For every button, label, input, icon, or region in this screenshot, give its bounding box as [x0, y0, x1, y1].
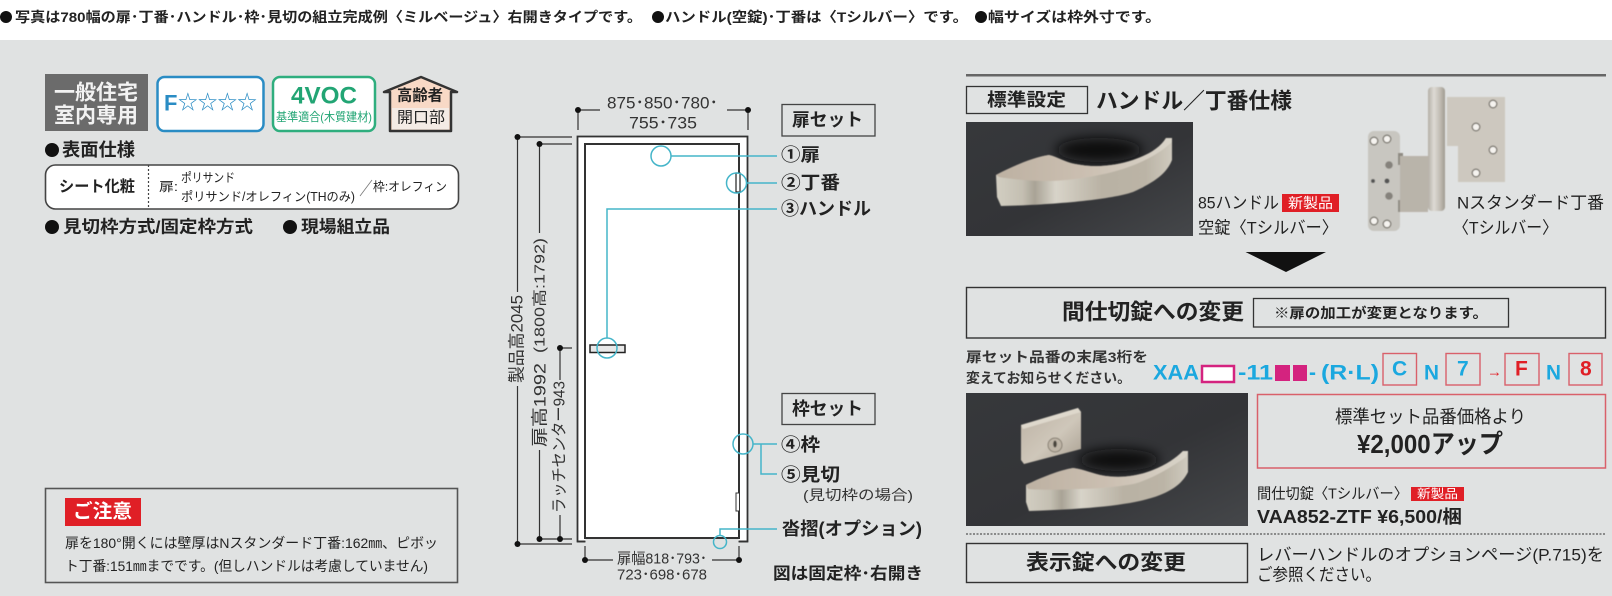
- heading panel: privacy lock change: [966, 288, 1606, 338]
- caption: N standard hinge: [1453, 194, 1604, 238]
- heading panel: privacy lock change: ※扉の加工が変更となります。: [1274, 305, 1488, 321]
- price panel: ¥2,000アップ: [1357, 429, 1503, 459]
- product code: -11: [1238, 362, 1273, 384]
- badge: elderly doorway house: [384, 77, 457, 131]
- part labels: door set: ③ハンドル: [781, 199, 871, 219]
- door set label: 扉セット: [792, 110, 863, 130]
- product code: C: [1392, 358, 1407, 380]
- photo: 85 handle: [966, 122, 1193, 236]
- product code: F: [1515, 358, 1528, 380]
- part labels: frame set: (見切枠の場合): [803, 487, 913, 503]
- photo: N standard hinge: [1368, 87, 1505, 231]
- product code: N: [1424, 362, 1439, 384]
- door width dimension bottom: 扉幅818･793･: [617, 550, 707, 568]
- product code: XAA: [1153, 362, 1199, 384]
- part labels: door set: [781, 145, 871, 219]
- surface spec table: ポリサンド/オレフィン(THのみ): [181, 190, 355, 204]
- standard setting heading: 標準設定: [987, 89, 1066, 110]
- option page reference: ご参照ください。: [1257, 566, 1381, 584]
- option page reference: [1257, 546, 1604, 584]
- badge: general housing interior: 室内専用: [54, 104, 138, 128]
- heading: surface spec: 表面仕様: [62, 140, 135, 160]
- product code: [1153, 354, 1602, 385]
- product code: 8: [1580, 358, 1592, 380]
- badge: F four stars: F: [164, 90, 177, 116]
- height dimensions left: (1800高:1792): [532, 238, 548, 353]
- badge: 4VOC: [273, 77, 375, 131]
- instruction text: 変えてお知らせください。: [966, 370, 1131, 386]
- height dimensions left: 製品高2045: [508, 295, 526, 383]
- notice panel: ご注意: [73, 500, 132, 522]
- feature: frame method: 見切枠方式/固定枠方式: [63, 216, 253, 236]
- door set label: [782, 104, 875, 136]
- door width dimension bottom: [582, 546, 742, 584]
- notice panel: 扉を180°開くには壁厚はNスタンダード丁番:162㎜、ピボッ: [65, 535, 438, 551]
- top notes: 写真は780幅の扉･丁番･ハンドル･枠･見切の組立完成例〈ミルベージュ〉右開きタイプです。: [15, 9, 642, 25]
- badge: general housing interior: 一般住宅: [54, 82, 138, 104]
- door elevation drawing: [577, 136, 748, 543]
- product code: -: [1309, 362, 1316, 384]
- notice panel: ト丁番:151㎜までです。(但しハンドルは考慮していません): [65, 558, 428, 574]
- heading panel: indicator lock change: 表示錠への変更: [1026, 552, 1186, 574]
- heading panel: privacy lock change: 間仕切錠への変更: [1062, 300, 1244, 324]
- part labels: frame set: ⑤見切: [781, 465, 840, 485]
- privacy lock caption: VAA852-ZTF ¥6,500/梱: [1257, 507, 1462, 527]
- badge: F four stars: ☆☆☆☆: [178, 91, 257, 114]
- height dimensions left: ラッチセンター943: [550, 381, 568, 513]
- top notes: ハンドル(空錠)･丁番は〈Tシルバー〉です。: [665, 9, 968, 25]
- heading panel: indicator lock change: [966, 544, 1248, 582]
- part labels: door set: ①扉: [781, 145, 820, 165]
- part labels: door set: ②丁番: [781, 173, 840, 193]
- width dimension top: 875･850･780･: [607, 94, 718, 112]
- standard setting heading: ハンドル／丁番仕様: [1096, 88, 1292, 114]
- caption: 85 handle: 空錠〈Tシルバー〉: [1198, 218, 1338, 238]
- badge: 4VOC: 4VOC: [291, 82, 357, 110]
- badge: general housing interior: [45, 74, 148, 131]
- surface spec table: 枠:オレフィン: [373, 180, 447, 194]
- product code: →: [1487, 364, 1502, 380]
- width dimension top: [575, 94, 751, 132]
- badge: elderly doorway house: 高齢者: [397, 86, 443, 104]
- privacy lock caption: 新製品: [1417, 487, 1458, 501]
- frame set label: 枠セット: [792, 399, 863, 419]
- part labels: frame set: ④枠: [781, 435, 820, 455]
- height dimensions left: [508, 134, 572, 547]
- caption: 85 handle: [1198, 194, 1339, 238]
- product code: N: [1546, 362, 1561, 384]
- frame set label: [782, 394, 875, 424]
- top notes: 幅サイズは枠外寸です。: [988, 9, 1161, 25]
- caption: N standard hinge: 〈Tシルバー〉: [1453, 218, 1558, 238]
- instruction text: 扉セット品番の末尾3桁を: [966, 349, 1148, 365]
- privacy lock caption: [1257, 486, 1464, 527]
- height dimensions left: 扉高1992: [530, 363, 550, 447]
- surface spec table: シート化粧: [59, 178, 135, 196]
- privacy lock caption: 間仕切錠〈Tシルバー〉: [1257, 486, 1408, 502]
- price panel: 標準セット品番価格より: [1335, 407, 1526, 427]
- part labels: frame set: 沓摺(オプション): [782, 519, 922, 539]
- part labels: frame set: [781, 435, 922, 539]
- price panel: [1258, 394, 1606, 468]
- right panel rule: [966, 74, 1606, 76]
- standard setting heading: [966, 86, 1292, 114]
- arrow down: [1246, 252, 1326, 272]
- badge: 4VOC: 基準適合(木質建材): [276, 109, 372, 124]
- surface spec table: 扉:: [159, 180, 178, 194]
- photo: privacy lock handle: [966, 393, 1248, 526]
- callout lines and circles: [597, 146, 777, 548]
- badge: F four stars: [158, 77, 264, 131]
- feature: site assembled: 現場組立品: [301, 218, 390, 236]
- surface spec table: [46, 165, 458, 209]
- notice panel: [46, 488, 458, 582]
- option page reference: レバーハンドルのオプションページ(P.715)を: [1257, 546, 1604, 564]
- drawing note: 図は固定枠･右開き: [773, 564, 923, 583]
- badge: elderly doorway house: 開口部: [397, 108, 445, 126]
- caption: 85 handle: 85ハンドル: [1198, 194, 1279, 212]
- product code: (R·L): [1321, 362, 1379, 384]
- door width dimension bottom: 723･698･678: [617, 566, 707, 584]
- product code: 7: [1457, 358, 1469, 380]
- caption: 85 handle: 新製品: [1288, 195, 1333, 211]
- width dimension top: 755･735: [629, 114, 697, 132]
- instruction text: [966, 349, 1148, 386]
- top notes: [0, 9, 1161, 25]
- surface spec table: ポリサンド: [181, 171, 235, 185]
- caption: N standard hinge: Nスタンダード丁番: [1457, 194, 1604, 212]
